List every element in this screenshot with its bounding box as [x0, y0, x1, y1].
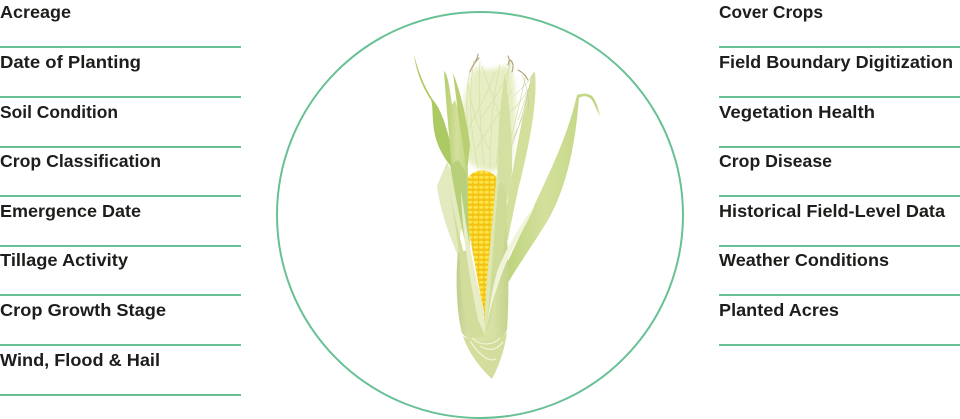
- left list: [0, 2, 241, 396]
- left pale leaf: [437, 162, 464, 256]
- item: Emergence Date: Emergence Date: [0, 201, 141, 221]
- item: Crop Classification: Crop Classification: [0, 151, 161, 171]
- item: Weather Conditions: Weather Conditions: [719, 250, 889, 270]
- far right leaf: [488, 94, 600, 322]
- item: Field Boundary Digitization: Field Boundary Digitization: [719, 52, 953, 72]
- illustration: corn cob with husk: [414, 54, 600, 379]
- right list: [719, 2, 960, 346]
- item: Planted Acres: Planted Acres: [719, 300, 839, 320]
- husk body: [457, 222, 508, 342]
- husk bottom fold: [463, 332, 507, 379]
- center right husk: [485, 172, 500, 332]
- right wrap leaf: [487, 205, 535, 325]
- center silk husk: [497, 73, 512, 225]
- left husk wrap: [446, 165, 484, 338]
- item: Historical Field-Level Data: Historical Field-Level Data: [719, 201, 945, 221]
- item: Crop Disease: Crop Disease: [719, 151, 832, 171]
- item: Crop Growth Stage: Crop Growth Stage: [0, 300, 166, 320]
- left outer leaf: [414, 54, 456, 172]
- item: Acreage: Acreage: [0, 2, 71, 22]
- item: Vegetation Health: Vegetation Health: [719, 102, 875, 122]
- right narrow leaf: [503, 72, 536, 240]
- item: Cover Crops: Cover Crops: [719, 2, 823, 22]
- center circle: [277, 12, 683, 418]
- item: Date of Planting: Date of Planting: [0, 52, 141, 72]
- left tall leaf: [444, 71, 470, 250]
- item: Soil Condition: Soil Condition: [0, 102, 118, 122]
- silk: [462, 54, 534, 171]
- item: Wind, Flood & Hail: Wind, Flood & Hail: [0, 350, 160, 370]
- kernels: [468, 170, 497, 322]
- item: Tillage Activity: Tillage Activity: [0, 250, 128, 270]
